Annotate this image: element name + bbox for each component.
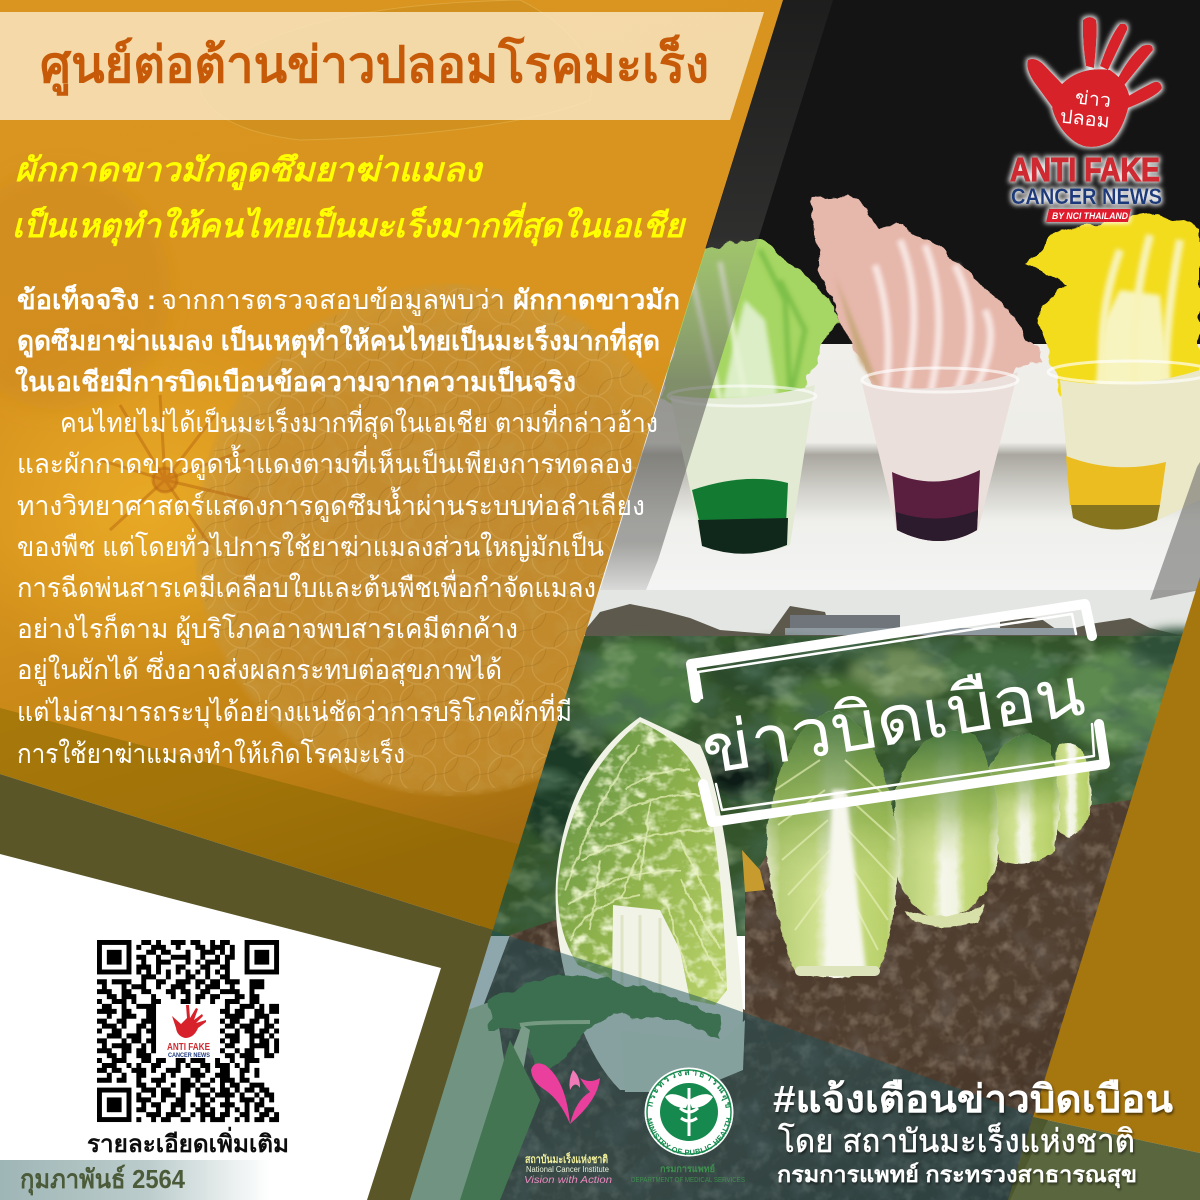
finder patterns <box>99 942 277 1120</box>
icon: red hand: ข่าว <box>1074 87 1112 112</box>
body text: ของพืช แต่โดยทั่วไปการใช้ยาฆ่าแมลงส่วนใหญ่มักเป็น <box>17 528 604 562</box>
logo: national cancer institute <box>524 1063 612 1186</box>
large left cabbage <box>550 715 743 1090</box>
footer hashtag and credit: #แจ้งเตือนข่าวบิดเบือน <box>773 1079 1173 1121</box>
logo: national cancer institute: Vision with Action <box>524 1175 612 1186</box>
wordmark <box>1010 151 1162 222</box>
top cell oval <box>200 0 591 140</box>
icon: red hand <box>1027 17 1162 147</box>
body text: อยู่ในผักได้ ซึ่งอาจส่งผลกระทบต่อสุขภาพได้ <box>17 651 502 687</box>
body text: การฉีดพ่นสารเคมีเคลือบใบและต้นพืชเพื่อกำจัดแมลง <box>17 569 596 603</box>
olive band <box>0 774 502 1200</box>
middle cabbage <box>767 710 900 978</box>
foreground cabbage leaves <box>410 972 745 1200</box>
body text: ข้อเท็จจริง : <box>17 282 156 315</box>
icon: red hand: ปลอม <box>1059 106 1111 133</box>
title: ศูนย์ต่อต้านข่าวปลอมโรคมะเร็ง <box>40 34 709 96</box>
body text: ทางวิทยาศาสตร์แสดงการดูดซึมน้ำผ่านระบบท่อลำเลียง <box>17 486 645 522</box>
bottom overlay: teal <box>410 930 1033 1200</box>
QR code <box>90 933 286 1129</box>
body text: แต่ไม่สามารถระบุได้อย่างแน่ชัดว่าการบริโภคผักที่มี <box>17 693 572 729</box>
logo: ministry of public health: DEPARTMENT OF MEDICAL SERVICES <box>631 1177 745 1184</box>
wordmark: ANTI FAKE <box>1010 151 1160 188</box>
far cabbages <box>895 731 1092 927</box>
translucent strip beside the text panel <box>600 0 833 590</box>
panel: orange background <box>0 0 783 930</box>
QR centre logo: CANCER NEWS <box>168 1052 211 1059</box>
green cabbage <box>660 237 841 554</box>
stamp: distorted news <box>691 604 1105 822</box>
pink cabbage <box>812 195 1043 541</box>
right orange shape <box>1033 577 1200 1153</box>
body text: จากการตรวจสอบข้อมูลพบว่า <box>161 285 505 316</box>
footer hashtag and credit: กรมการแพทย์ กระทรวงสาธารณสุข <box>777 1162 1137 1189</box>
logo: ministry of public health: กระทรวงสาธารณสุข <box>648 1069 730 1108</box>
yellow subtitle: เป็นเหตุทำให้คนไทยเป็นมะเร็งมากที่สุดในเอเชีย <box>12 202 687 247</box>
yellow subtitle <box>12 151 687 247</box>
icon: pink ribbon <box>531 1063 600 1124</box>
footer hashtag and credit: โดย สถาบันมะเร็งแห่งชาติ <box>778 1122 1135 1159</box>
header banner <box>0 12 764 120</box>
body text: อย่างไรก็ตาม ผู้บริโภคอาจพบสารเคมีตกค้าง <box>17 611 518 645</box>
wordmark: BY NCI THAILAND <box>1052 211 1128 222</box>
photo: coloured cabbages in cups <box>480 0 1200 590</box>
virus spikes <box>100 395 250 545</box>
translucent strip right side <box>1150 462 1200 600</box>
QR centre logo: ANTI FAKE <box>167 1042 210 1053</box>
date bar: กุมภาพันธ์ 2564 <box>20 1164 185 1196</box>
body text: การใช้ยาฆ่าแมลงทำให้เกิดโรคมะเร็ง <box>17 736 405 769</box>
yellow subtitle: ผักกาดขาวมักดูดซึมยาฆ่าแมลง <box>15 151 484 191</box>
QR modules <box>97 942 279 1120</box>
logo: ministry of public health: MINISTRY OF PUBLIC HEALTH <box>646 1118 732 1155</box>
body text: และผักกาดขาวดูดน้ำแดงตามที่เห็นเป็นเพียงการทดลอง <box>17 444 633 480</box>
white corner <box>0 854 441 1200</box>
body text: คนไทยไม่ได้เป็นมะเร็งมากที่สุดในเอเชีย ตามที่กล่าวอ้าง <box>60 404 658 440</box>
logo: national cancer institute: National Cancer Institute <box>526 1165 610 1174</box>
stamp: distorted news: ข่าวบิดเบือน <box>696 653 1090 789</box>
QR centre logo <box>167 1005 211 1059</box>
right olive shape <box>1008 1117 1200 1200</box>
body text: ในเอเชียมีการบิดเบือนข้อความจากความเป็นจริง <box>15 364 576 397</box>
logo: national cancer institute: สถาบันมะเร็งแห่งชาติ <box>525 1152 608 1166</box>
photo: cabbage field <box>400 590 1200 1200</box>
cancer cell illustration <box>194 284 660 796</box>
body text: ดูดซึมยาฆ่าแมลง เป็นเหตุทำให้คนไทยเป็นมะเร็งมากที่สุด <box>17 321 660 358</box>
wordmark: CANCER NEWS <box>1011 184 1162 209</box>
QR caption: รายละเอียดเพิ่มเติม <box>87 1126 289 1158</box>
body text <box>15 282 680 769</box>
body text: ผักกาดขาวมัก <box>513 285 680 315</box>
logo: anti fake cancer news <box>1010 17 1162 222</box>
logo: ministry of public health <box>631 1068 745 1184</box>
logo: ministry of public health: กรมการแพทย์ <box>660 1163 715 1175</box>
footer hashtag and credit <box>773 1079 1173 1189</box>
yellow cabbage <box>1027 213 1200 530</box>
date bar <box>0 1160 270 1200</box>
